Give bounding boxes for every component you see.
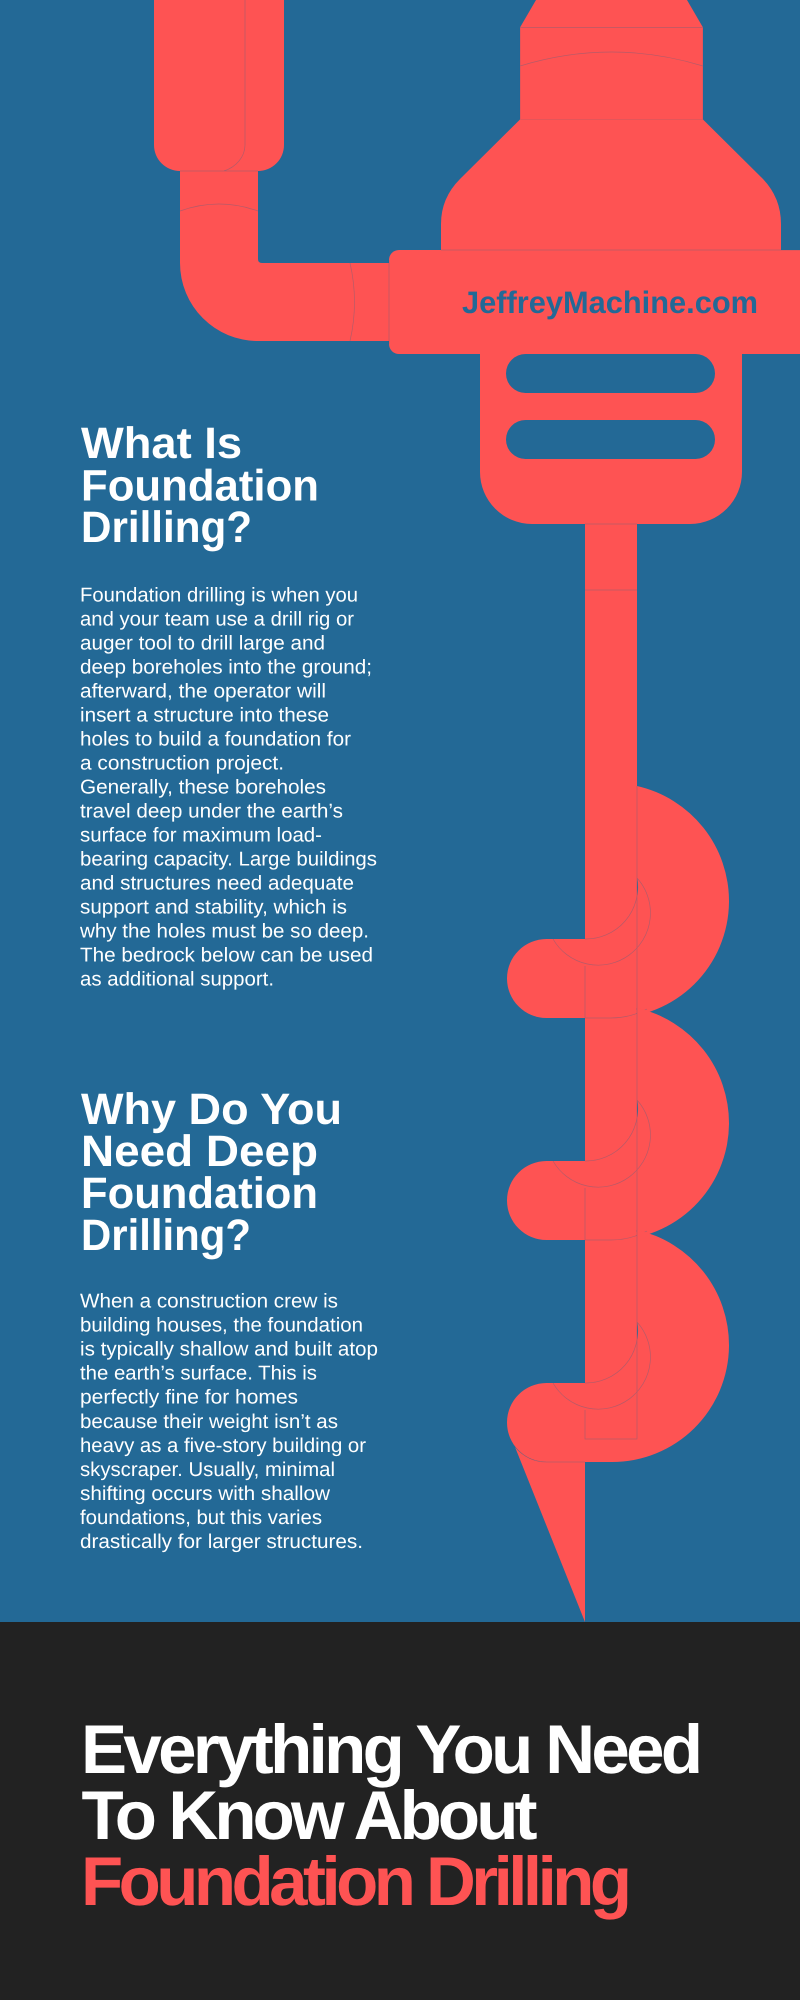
footer title: Everything You Need [81,1711,703,1788]
text block: what is foundation drilling: deep boreholes into the ground; [80,656,372,678]
drill head: collar with brand name [389,250,800,354]
footer title: To Know About [82,1777,538,1854]
drill head: grip with two slots [480,354,742,524]
brand name: JeffreyMachine.com [462,285,758,320]
text block: why deep foundation drilling: heavy as a five-story building or [80,1435,366,1457]
auger flight 3 [507,1230,729,1462]
text block: what is foundation drilling: and structures need adequate [80,872,354,894]
text block: why deep foundation drilling: drastically for larger structures. [80,1531,363,1553]
text block: why deep foundation drilling: shifting occurs with shallow [80,1483,331,1505]
drill head: top cap [520,0,703,120]
heading: What Is Foundation Drilling? [81,419,319,552]
footer title: Foundation Drilling [81,1843,632,1920]
text block: what is foundation drilling: holes to build a foundation for [80,728,351,750]
heading: What Is Foundation Drilling?: What Is [81,419,242,468]
footer panel [0,1622,800,2000]
heading: Why Do You Need Deep Foundation Drilling?: Foundation [81,1169,318,1218]
text block: what is foundation drilling: surface for maximum load- [80,824,322,846]
text block: why deep foundation drilling: When a construction crew is [80,1291,338,1313]
text block: what is foundation drilling [79,584,377,990]
heading: What Is Foundation Drilling?: Foundation [81,462,319,510]
text block: why deep foundation drilling: the earth’s surface. This is [80,1363,317,1385]
text block: what is foundation drilling: The bedrock below can be used [80,944,373,966]
text block: what is foundation drilling: why the holes must be so deep. [79,920,369,942]
footer title [81,1711,703,1920]
heading: Why Do You Need Deep Foundation Drilling?: Need Deep [81,1127,318,1176]
heading: Why Do You Need Deep Foundation Drilling? [81,1085,342,1260]
text block: what is foundation drilling: support and stability, which is [80,896,347,918]
text block: what is foundation drilling: and your team use a drill rig or [80,608,354,630]
text block: why deep foundation drilling [80,1291,378,1553]
illustration: foundation drill rig [154,0,800,1622]
text block: what is foundation drilling: auger tool to drill large and [80,632,325,654]
heading: What Is Foundation Drilling?: Drilling? [81,503,252,552]
text block: what is foundation drilling: a construction project. [80,752,284,774]
auger flight 1 [507,786,729,1018]
text block: what is foundation drilling: Generally, these boreholes [80,776,326,798]
text block: what is foundation drilling: insert a structure into these [80,704,329,726]
auger flight 2 [507,1008,729,1240]
text block: why deep foundation drilling: building houses, the foundation [80,1315,363,1337]
heading: Why Do You Need Deep Foundation Drilling?: Drilling? [81,1211,251,1260]
drill tip [515,1447,585,1622]
text block: what is foundation drilling: as additional support. [80,968,274,990]
text block: what is foundation drilling: afterward, the operator will [80,680,326,702]
drill shaft [585,524,637,1439]
hose: elbow pipe [180,171,395,341]
hose: upper sleeve [154,0,284,171]
text block: why deep foundation drilling: is typically shallow and built atop [80,1339,378,1361]
text block: why deep foundation drilling: because their weight isn’t as [80,1411,338,1433]
text block: why deep foundation drilling: perfectly fine for homes [80,1387,298,1409]
text block: what is foundation drilling: bearing capacity. Large buildings [80,848,377,870]
drill head: motor body [441,120,781,255]
text block: why deep foundation drilling: foundations, but this varies [80,1507,322,1529]
heading: Why Do You Need Deep Foundation Drilling?: Why Do You [81,1085,342,1134]
text block: why deep foundation drilling: skyscraper. Usually, minimal [80,1459,335,1481]
text block: what is foundation drilling: travel deep under the earth’s [80,800,343,822]
text block: what is foundation drilling: Foundation drilling is when you [80,584,358,606]
